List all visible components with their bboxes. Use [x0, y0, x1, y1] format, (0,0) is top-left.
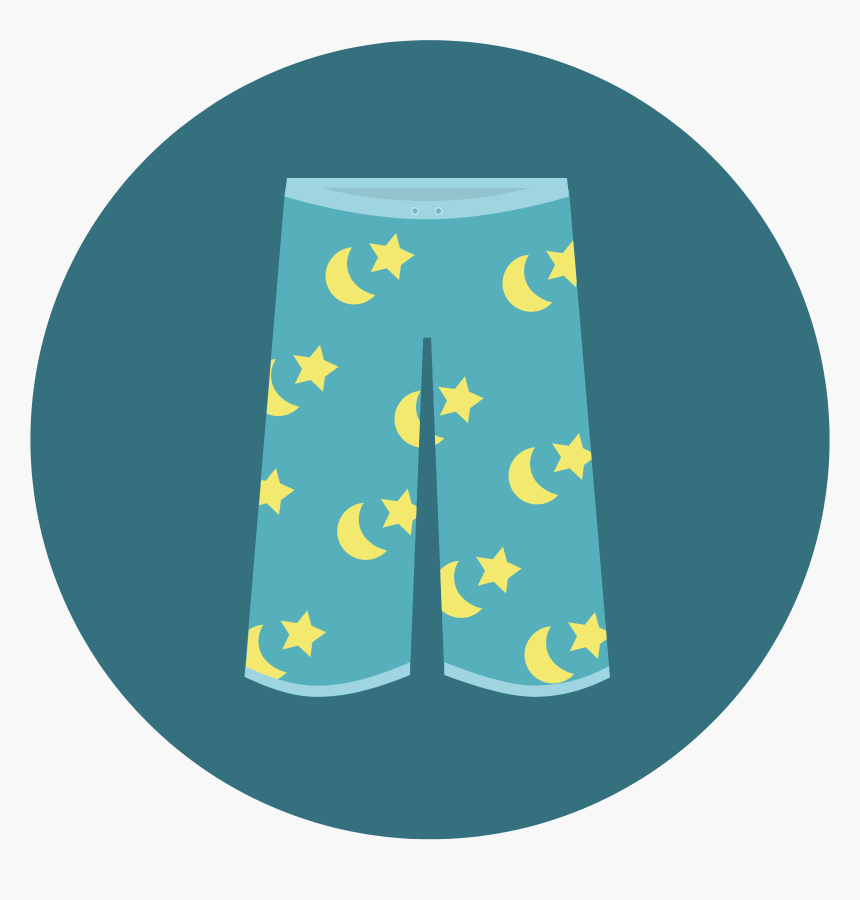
crotch gap — [410, 338, 444, 680]
pants body — [244, 190, 610, 697]
waistband — [284, 178, 569, 219]
pants — [244, 178, 610, 697]
moon and star pattern — [246, 233, 607, 684]
button right — [435, 208, 442, 214]
left leg hem — [244, 662, 410, 697]
waistband inner shadow — [322, 188, 530, 201]
button left — [412, 208, 418, 214]
right leg hem — [444, 662, 610, 697]
